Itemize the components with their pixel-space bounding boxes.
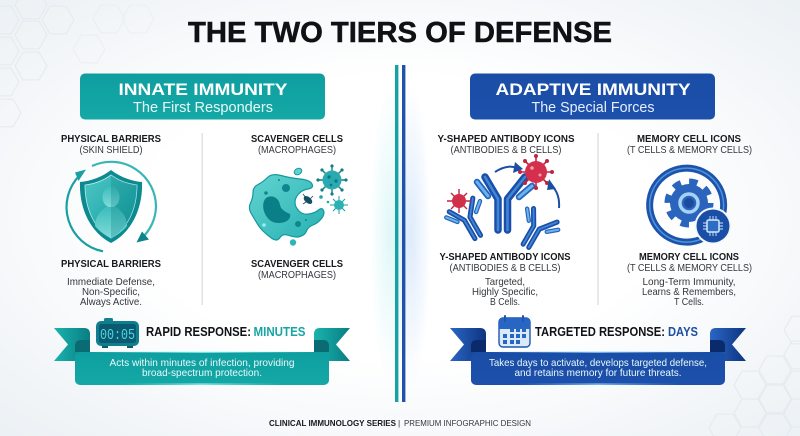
physical barriers heading: PHYSICAL BARRIERS bbox=[61, 134, 161, 145]
targeted response heading: TARGETED RESPONSE: bbox=[535, 325, 665, 339]
memory cell heading: (T CELLS & MEMORY CELLS) bbox=[627, 145, 752, 156]
scavenger cells heading: (MACROPHAGES) bbox=[258, 145, 336, 156]
memory cell description: MEMORY CELL ICONS bbox=[639, 252, 739, 263]
antibody description: Targeted, bbox=[485, 277, 525, 288]
callout: rapid response ribbon: MINUTES bbox=[254, 325, 306, 339]
antibody heading: Y-SHAPED ANTIBODY ICONS bbox=[438, 134, 575, 145]
scavenger cells description: SCAVENGER CELLS bbox=[251, 259, 343, 270]
adaptive header: ADAPTIVE IMMUNITY bbox=[496, 80, 691, 99]
adaptive header bbox=[470, 74, 715, 120]
icon: digital clock bbox=[96, 318, 139, 348]
panel: innate immunity bbox=[54, 74, 350, 385]
physical barriers description: Immediate Defense, bbox=[67, 277, 155, 288]
hexagon pattern: bottom right bbox=[709, 316, 800, 436]
footer bbox=[269, 418, 531, 428]
footer: | bbox=[398, 418, 400, 428]
physical barriers description bbox=[61, 259, 161, 308]
callout: rapid response ribbon: Acts within minutes of infection, providing bbox=[110, 358, 295, 369]
icon: macrophage and viruses bbox=[249, 164, 348, 246]
hexagon pattern: top left bbox=[0, 0, 154, 127]
memory cell description bbox=[627, 252, 752, 308]
antibody description bbox=[440, 252, 571, 308]
callout: targeted response ribbon: and retains memory for future threats. bbox=[514, 368, 682, 379]
physical barriers description: Non-Specific, bbox=[82, 287, 140, 298]
physical barriers description: PHYSICAL BARRIERS bbox=[61, 259, 161, 270]
scavenger cells heading: SCAVENGER CELLS bbox=[251, 134, 343, 145]
innate header: The First Responders bbox=[133, 100, 273, 116]
memory cell heading: MEMORY CELL ICONS bbox=[637, 134, 741, 145]
innate header bbox=[80, 74, 325, 120]
scavenger cells description bbox=[251, 259, 343, 281]
antibody description: Highly Specific, bbox=[472, 287, 538, 298]
memory cell description: Learns & Remembers, bbox=[642, 287, 736, 298]
callout: targeted response ribbon bbox=[450, 315, 746, 385]
title: THE TWO TIERS OF DEFENSE bbox=[188, 17, 612, 49]
icon: digital clock: 00:05 bbox=[100, 327, 135, 344]
antibody description: Y-SHAPED ANTIBODY ICONS bbox=[440, 252, 571, 263]
antibody description: (ANTIBODIES & B CELLS) bbox=[450, 263, 560, 274]
panel: adaptive immunity bbox=[438, 74, 752, 385]
innate header: INNATE IMMUNITY bbox=[118, 80, 288, 99]
callout: targeted response ribbon: DAYS bbox=[668, 325, 698, 339]
memory cell description: T Cells. bbox=[674, 297, 704, 308]
icon: shield with person bbox=[67, 162, 156, 251]
antibody heading: (ANTIBODIES & B CELLS) bbox=[450, 145, 562, 156]
physical barriers heading: (SKIN SHIELD) bbox=[80, 145, 142, 156]
memory cell heading bbox=[627, 134, 752, 156]
footer: PREMIUM INFOGRAPHIC DESIGN bbox=[404, 418, 531, 428]
callout: targeted response ribbon: Takes days to activate, develops targeted defense, bbox=[489, 358, 707, 369]
memory cell description: Long-Term Immunity, bbox=[642, 277, 736, 288]
adaptive header: The Special Forces bbox=[532, 100, 654, 116]
center divider bbox=[370, 65, 431, 402]
physical barriers description: Always Active. bbox=[80, 297, 142, 308]
memory cell description: (T CELLS & MEMORY CELLS) bbox=[627, 263, 752, 274]
antibody heading bbox=[438, 134, 575, 156]
callout: rapid response ribbon: broad-spectrum protection. bbox=[142, 368, 262, 379]
icon: memory cell gear and chip bbox=[650, 168, 732, 244]
scavenger cells heading bbox=[251, 134, 343, 156]
physical barriers heading bbox=[61, 134, 161, 156]
callout: rapid response ribbon bbox=[54, 318, 350, 385]
icon: antibodies and viruses bbox=[445, 154, 561, 256]
scavenger cells description: (MACROPHAGES) bbox=[258, 270, 336, 281]
icon: calendar bbox=[499, 315, 530, 347]
rapid response heading: RAPID RESPONSE: bbox=[146, 325, 251, 339]
footer: CLINICAL IMMUNOLOGY SERIES bbox=[269, 418, 396, 428]
antibody description: B Cells. bbox=[490, 297, 520, 308]
